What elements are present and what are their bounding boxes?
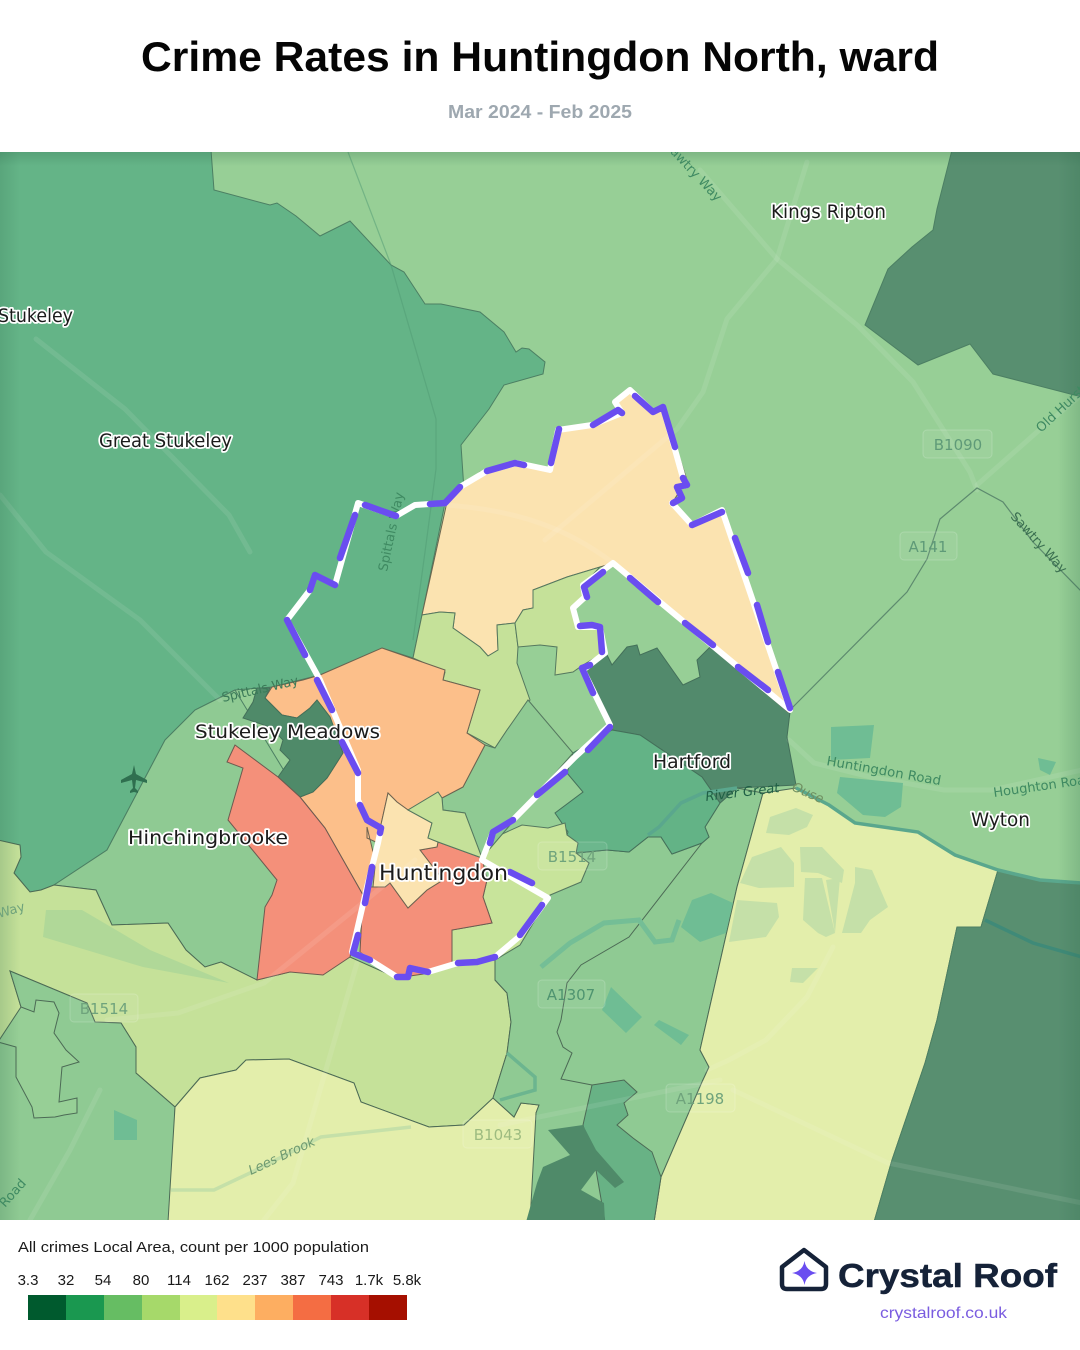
ward boundary: Huntingdon North (287, 390, 790, 977)
place labels: Wyton (971, 809, 1030, 831)
place labels (0, 201, 1030, 885)
area: Hartford dark (583, 645, 796, 803)
area: south-west green (0, 970, 175, 1118)
area: north-east dark (865, 150, 1080, 397)
boundary: white casing (287, 390, 790, 977)
legend values: 114 (167, 1272, 191, 1289)
legend (18, 1239, 422, 1320)
area: west Stukeley (0, 150, 545, 892)
area: south yellow (168, 1059, 543, 1222)
place labels: Hinchingbrooke (128, 827, 288, 849)
road and river labels: Spittals Way (376, 491, 408, 573)
map detail: pale lakes on the east fields (729, 808, 888, 983)
legend values: 80 (133, 1272, 149, 1289)
map detail: thin railway across the west (348, 152, 436, 640)
map detail: railway line and dark road line to the north-east (790, 488, 1080, 710)
road number shields: B1043 (474, 1126, 522, 1144)
road number shields: A1307 (547, 986, 595, 1004)
legend values: 32 (58, 1272, 74, 1289)
area: red west (227, 745, 363, 980)
brand logo (782, 1250, 1058, 1322)
area: red east (360, 842, 492, 978)
place labels: Huntingdon (379, 861, 508, 885)
road number shields: A141 (909, 538, 947, 556)
place labels: Hartford (653, 751, 731, 773)
area: south dark patch (526, 1125, 624, 1222)
road number shields: B1514 (80, 1000, 128, 1018)
road and river labels: Ouse (789, 780, 826, 807)
area: light green central (413, 612, 530, 748)
road number shields: A1198 (676, 1090, 724, 1108)
legend colour scale (28, 1295, 407, 1320)
place labels: Great Stukeley (99, 430, 232, 452)
legend values: 54 (95, 1272, 111, 1289)
edge shading (0, 152, 1080, 1220)
area: cream town centre (373, 793, 443, 908)
legend title: All crimes Local Area, count per 1000 population (18, 1239, 369, 1256)
area: north ward cream (422, 390, 788, 712)
area: south mid-green patch (583, 1080, 661, 1222)
area: mid green central (442, 700, 573, 858)
area: dark green Stukeley Meadows (243, 688, 343, 797)
map detail: teal lakes (114, 725, 1056, 1140)
area: east yellow (654, 788, 998, 1222)
road number shields (70, 430, 992, 1148)
area: Hartford south green (555, 730, 720, 854)
map detail: faint roads (0, 162, 1080, 1220)
subtitle: date range: Mar 2024 - Feb 2025 (448, 102, 632, 122)
road and river labels: Huntingdon Road (825, 754, 942, 789)
icon: house with star (782, 1250, 826, 1289)
map base: north and central areas (0, 152, 1080, 1220)
place labels: Stukeley (0, 305, 73, 327)
place labels: Stukeley Meadows (195, 721, 380, 743)
brand name: Crystal Roof (838, 1258, 1058, 1295)
legend values: 162 (204, 1272, 230, 1289)
road and river labels: Lees Brook (246, 1134, 318, 1179)
area: south-east green (493, 788, 763, 1222)
road number shields: B1514 (548, 848, 596, 866)
legend values: 5.8k (393, 1272, 422, 1289)
area: far south-east dark (874, 870, 1080, 1222)
legend values (18, 1272, 422, 1289)
legend values: 743 (318, 1272, 344, 1289)
legend values: 3.3 (18, 1272, 38, 1289)
map detail: lagoon on the west fields (43, 910, 229, 983)
area: small light green town (408, 792, 482, 858)
map detail: rivers (171, 788, 1080, 1190)
road and river labels: Sawtry Way (661, 138, 725, 205)
place labels: Kings Ripton (771, 201, 886, 223)
area: light green north-central (515, 567, 603, 675)
road and river labels: River Great (705, 781, 781, 805)
brand url: crystalroof.co.uk (880, 1305, 1008, 1322)
boundary: purple dashes (287, 396, 790, 977)
area: B1514 yellow-green (452, 823, 589, 965)
area: Hinchingbrooke (54, 690, 363, 980)
road and river labels: Sawtry Way (1007, 510, 1070, 577)
legend values: 387 (280, 1272, 306, 1289)
legend values: 1.7k (355, 1272, 384, 1289)
icon: airport plane (121, 765, 147, 793)
road and river labels (0, 138, 1080, 1211)
area: south-east inner boundary (557, 843, 702, 1085)
area: orange north of town (265, 648, 485, 895)
legend values: 237 (242, 1272, 268, 1289)
area: south central light green (0, 840, 511, 1127)
road and river labels: Spittals Way (221, 674, 300, 706)
title: Crime Rates in Huntingdon North, ward (141, 33, 939, 80)
road number shields: B1090 (934, 436, 982, 454)
